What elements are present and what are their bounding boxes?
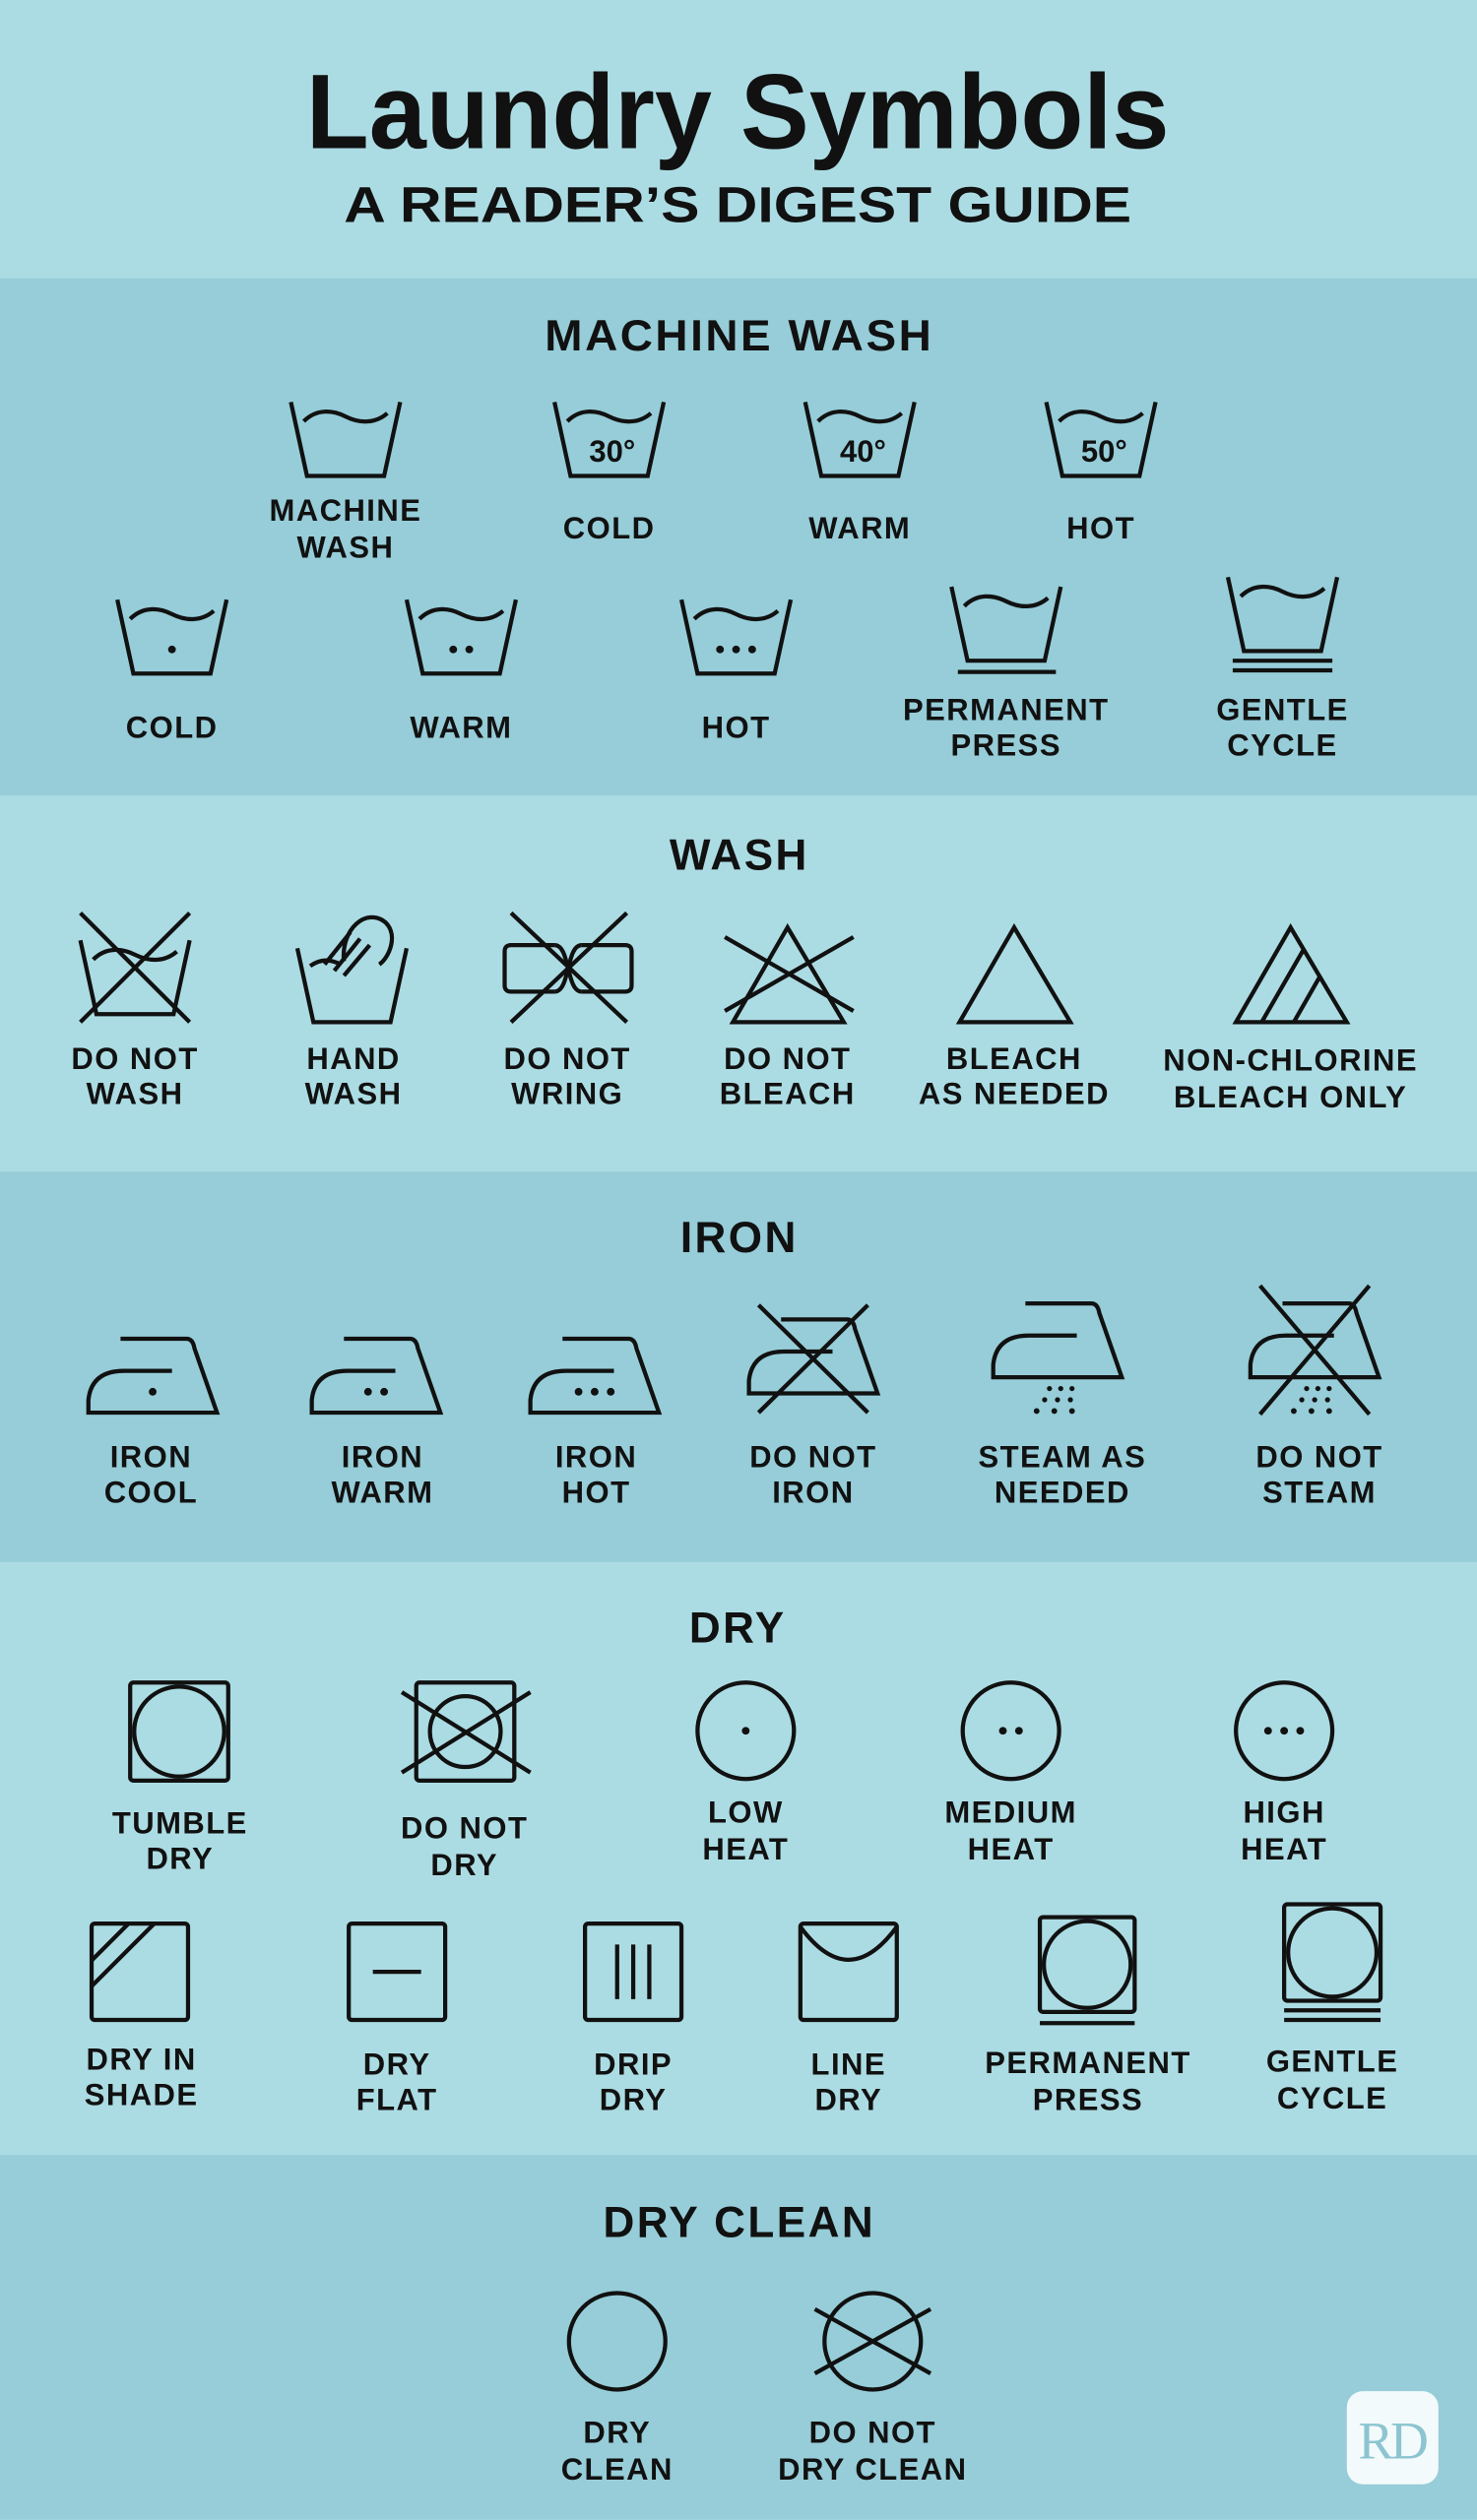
label: low heat: HEAT — [702, 1832, 789, 1866]
heading: machine wash: MACHINE WASH — [545, 312, 933, 360]
label: high heat: HEAT — [1241, 1832, 1327, 1866]
heading: iron: IRON — [680, 1214, 799, 1262]
label: medium heat: MEDIUM — [944, 1795, 1077, 1829]
logo: RD: RD — [1358, 2412, 1427, 2471]
label: do not steam: STEAM — [1262, 1475, 1377, 1509]
label: medium heat: HEAT — [968, 1832, 1055, 1866]
label: non-chlorine bleach only: NON-CHLORINE — [1163, 1042, 1418, 1077]
heading: wash: WASH — [670, 831, 809, 879]
icon: dry in shade — [92, 1923, 188, 2020]
label: tumble dry: DRY — [146, 1842, 214, 1876]
label: iron cool: IRON — [110, 1440, 192, 1475]
label: do not wring: DO NOT — [503, 1041, 631, 1076]
icon: do not iron — [749, 1305, 877, 1413]
label: iron warm: WARM — [331, 1475, 433, 1509]
icon: warm 40 — [805, 402, 915, 475]
icon: dry clean — [569, 2294, 666, 2389]
panel: dry — [85, 1604, 1398, 2116]
label: bleach as needed: BLEACH — [946, 1041, 1082, 1076]
icon: medium heat — [963, 1682, 1060, 1779]
label: do not wring: WRING — [511, 1077, 623, 1111]
icon: cold dot — [117, 599, 226, 673]
heading: dry clean: DRY CLEAN — [604, 2198, 875, 2246]
icon: machine wash — [290, 402, 400, 475]
icon: high heat — [1236, 1682, 1332, 1779]
icon: hot dots — [681, 599, 791, 673]
icon: do not wash — [81, 913, 190, 1022]
label: non-chlorine bleach only: BLEACH ONLY — [1174, 1080, 1407, 1114]
icon: drip dry — [585, 1923, 681, 2020]
label: steam as needed: NEEDED — [995, 1475, 1130, 1509]
label: do not dry: DRY — [430, 1848, 498, 1882]
label: do not bleach: DO NOT — [724, 1041, 851, 1076]
label: dry flat: FLAT — [356, 2082, 438, 2116]
label: gentle cycle: CYCLE — [1277, 2081, 1387, 2115]
label: do not dry clean: DRY CLEAN — [778, 2452, 967, 2487]
label: dry flat: DRY — [363, 2048, 431, 2082]
label: iron cool: COOL — [104, 1475, 198, 1509]
label: drip dry: DRY — [600, 2082, 667, 2116]
label: hot: HOT — [702, 711, 770, 745]
icon: permanent press — [951, 587, 1060, 672]
label: tumble dry: TUMBLE — [112, 1806, 248, 1841]
icon: gentle cycle — [1228, 577, 1337, 670]
icon: do not steam — [1251, 1286, 1379, 1415]
icon: steam as needed — [994, 1303, 1122, 1414]
label: hand wash: HAND — [306, 1041, 401, 1076]
label: warm: WARM — [410, 711, 512, 745]
icon: hand wash — [297, 917, 407, 1022]
label: cold: COLD — [563, 511, 655, 545]
panel: iron — [89, 1214, 1383, 1509]
icon: do not wring — [505, 913, 631, 1022]
icon: iron hot — [531, 1339, 659, 1413]
label: do not dry: DO NOT — [401, 1811, 528, 1846]
icon: warm dots — [407, 599, 516, 673]
label: bleach as needed: AS NEEDED — [919, 1077, 1110, 1111]
label: gentle cycle: GENTLE — [1266, 2044, 1398, 2078]
icon: permanent press dry — [1040, 1918, 1134, 2023]
label: hand wash: WASH — [305, 1077, 403, 1111]
label: do not iron: DO NOT — [749, 1440, 877, 1475]
label: permanent press: PERMANENT — [985, 2046, 1191, 2080]
label: dry in shade: SHADE — [85, 2078, 199, 2112]
label: dry in shade: DRY IN — [87, 2043, 197, 2077]
label: hot: HOT — [1066, 511, 1135, 545]
icon: cold 30 — [554, 402, 664, 475]
label: permanent press: PRESS — [951, 727, 1061, 762]
icon: hot 50: 50° — [1081, 434, 1127, 469]
icon: hot 50 — [1047, 402, 1156, 475]
label: do not iron: IRON — [772, 1475, 855, 1509]
label: iron hot: HOT — [562, 1475, 630, 1509]
label: dry clean: CLEAN — [561, 2452, 674, 2487]
label: low heat: LOW — [708, 1795, 784, 1829]
icon: tumble dry — [130, 1682, 228, 1781]
panel: dry clean — [561, 2198, 1439, 2487]
subtitle: A READER’S DIGEST GUIDE — [344, 177, 1131, 233]
heading: dry: DRY — [689, 1604, 787, 1652]
icon: low heat — [697, 1682, 794, 1779]
logo: RD — [1347, 2391, 1439, 2485]
icon: cold 30: 30° — [589, 434, 635, 469]
icon: do not dry — [402, 1682, 531, 1781]
label: permanent press: PRESS — [1033, 2082, 1143, 2116]
label: machine wash: MACHINE — [269, 493, 421, 528]
label: line dry: LINE — [811, 2048, 886, 2082]
label: do not steam: DO NOT — [1255, 1440, 1383, 1475]
label: iron warm: IRON — [342, 1440, 423, 1475]
label: warm: WARM — [808, 511, 911, 545]
label: cold: COLD — [126, 711, 218, 745]
icon: iron warm — [312, 1339, 440, 1413]
label: do not bleach: BLEACH — [720, 1077, 856, 1111]
label: line dry: DRY — [814, 2082, 882, 2116]
icon: bleach as needed — [959, 927, 1070, 1022]
label: iron hot: IRON — [555, 1440, 637, 1475]
label: steam as needed: STEAM AS — [978, 1440, 1146, 1475]
title: Laundry Symbols — [306, 52, 1169, 171]
label: drip dry: DRIP — [594, 2048, 673, 2082]
label: do not wash: WASH — [87, 1077, 184, 1111]
icon: gentle cycle dry — [1284, 1905, 1381, 2020]
panel: machine wash — [117, 312, 1349, 762]
icon: warm 40: 40° — [840, 434, 886, 469]
icon: iron cool — [89, 1339, 217, 1413]
icon: line dry — [801, 1923, 897, 2020]
label: permanent press: PERMANENT — [903, 693, 1110, 727]
label: do not dry clean: DO NOT — [809, 2415, 936, 2449]
icon: dry flat — [349, 1923, 445, 2020]
label: high heat: HIGH — [1243, 1795, 1325, 1829]
label: gentle cycle: CYCLE — [1227, 727, 1338, 762]
label: machine wash: WASH — [296, 531, 394, 565]
icon: do not bleach — [725, 927, 854, 1022]
label: dry clean: DRY — [583, 2415, 651, 2449]
icon: do not dry clean — [815, 2294, 931, 2389]
panel: wash — [71, 831, 1418, 1114]
label: gentle cycle: GENTLE — [1216, 693, 1349, 727]
icon: non-chlorine bleach — [1236, 927, 1347, 1022]
label: do not wash: DO NOT — [71, 1041, 199, 1076]
